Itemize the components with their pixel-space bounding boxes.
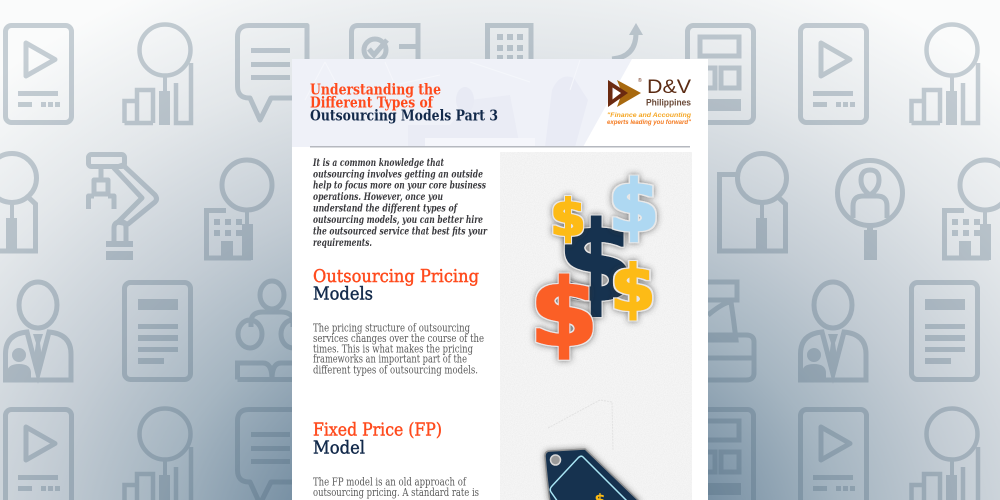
icon: search person	[838, 160, 902, 260]
heading: outsourcing pricing models: Models	[313, 284, 373, 304]
title: Outsourcing Models Part 3	[310, 108, 498, 125]
icon: search building	[944, 160, 1000, 260]
intro text: understand the different types of	[313, 202, 459, 214]
icon: layout card	[688, 410, 754, 500]
icon: office building	[488, 26, 531, 83]
text: fixed price paragraph: outsourcing pricing. A standard rate is	[313, 486, 479, 499]
text: pricing paragraph: times. This is what makes the pricing	[313, 342, 473, 355]
icon: document	[912, 282, 978, 380]
text: pricing paragraph	[313, 322, 484, 376]
intro text: requirements.	[313, 237, 372, 249]
heading: fixed price model: Model	[313, 437, 365, 458]
logo: D&V Philippines: "Finance and Accounting	[607, 112, 691, 119]
illustration: dollar signs: $	[609, 165, 659, 248]
icon: video document	[800, 26, 866, 122]
illustration: faded tag outline	[548, 400, 613, 450]
illustration: price tag	[545, 449, 640, 500]
icon: document	[124, 282, 190, 380]
heading: outsourcing pricing models	[313, 266, 479, 304]
illustration: dollar signs	[530, 165, 659, 367]
heading: fixed price model	[313, 420, 442, 458]
panel: illustration column	[500, 152, 692, 500]
intro text	[312, 157, 488, 249]
title	[310, 82, 498, 125]
heading: fixed price model: Fixed Price (FP)	[313, 420, 442, 441]
text: pricing paragraph: frameworks an important part of the	[313, 353, 467, 366]
illustration: dollar signs: $	[557, 199, 635, 327]
icon: chat bubble	[238, 26, 307, 120]
logo: D&V Philippines: ®	[638, 77, 642, 84]
icon: group of people	[238, 281, 307, 380]
icon: video document	[800, 410, 866, 500]
icon: search building	[206, 160, 272, 260]
logo: D&V Philippines: D&V	[647, 77, 691, 98]
logo: D&V Philippines: Philippines	[646, 98, 691, 109]
title: Different Types of	[310, 94, 434, 112]
icon: chat bubble	[238, 410, 307, 500]
icon: layout card	[688, 26, 754, 122]
panel: infographic card	[292, 59, 708, 500]
icon: video document	[6, 26, 72, 122]
icon: rising arrow	[612, 23, 643, 59]
text: fixed price paragraph	[313, 476, 479, 499]
text: pricing paragraph: services changes over the course of the	[313, 332, 484, 345]
icon: suited person	[800, 282, 866, 380]
icon: video document	[6, 410, 72, 500]
text: pricing paragraph: The pricing structure of outsourcing	[313, 322, 470, 335]
logo: D&V Philippines: experts leading you forward"	[607, 119, 692, 126]
illustration: dollar signs: $	[530, 259, 598, 367]
logo: D&V Philippines	[607, 77, 692, 126]
intro text: the outsourced service that best fits your	[313, 225, 488, 237]
icon: search chart	[124, 24, 191, 125]
icon: suited person	[6, 282, 71, 380]
intro text: outsourcing involves getting an outside	[313, 168, 483, 180]
icon: search document	[720, 154, 786, 253]
illustration: dollar signs: $	[550, 188, 586, 247]
icon: search chart	[912, 408, 978, 500]
icon: checklist card	[352, 26, 418, 83]
header photo band	[292, 59, 632, 147]
icon: cashier	[708, 282, 754, 380]
text: pricing paragraph: different types of outsourcing models.	[313, 363, 478, 376]
icon: search document	[0, 154, 36, 253]
header divider	[310, 146, 690, 148]
intro text: outsourcing models, you can better hire	[313, 214, 483, 226]
text: fixed price paragraph: The FP model is an old approach of	[313, 476, 467, 489]
illustration: dollar signs: $	[610, 253, 656, 326]
icon: search chart	[912, 24, 978, 125]
intro text: help to focus more on your core business	[313, 180, 486, 192]
intro text: operations. However, once you	[313, 191, 443, 203]
intro text: It is a common knowledge that	[312, 157, 444, 169]
icon: search chart	[124, 408, 191, 500]
icon: robot arm	[88, 154, 156, 260]
heading: outsourcing pricing models: Outsourcing Pricing	[313, 266, 479, 287]
title: Understanding the	[310, 82, 441, 98]
